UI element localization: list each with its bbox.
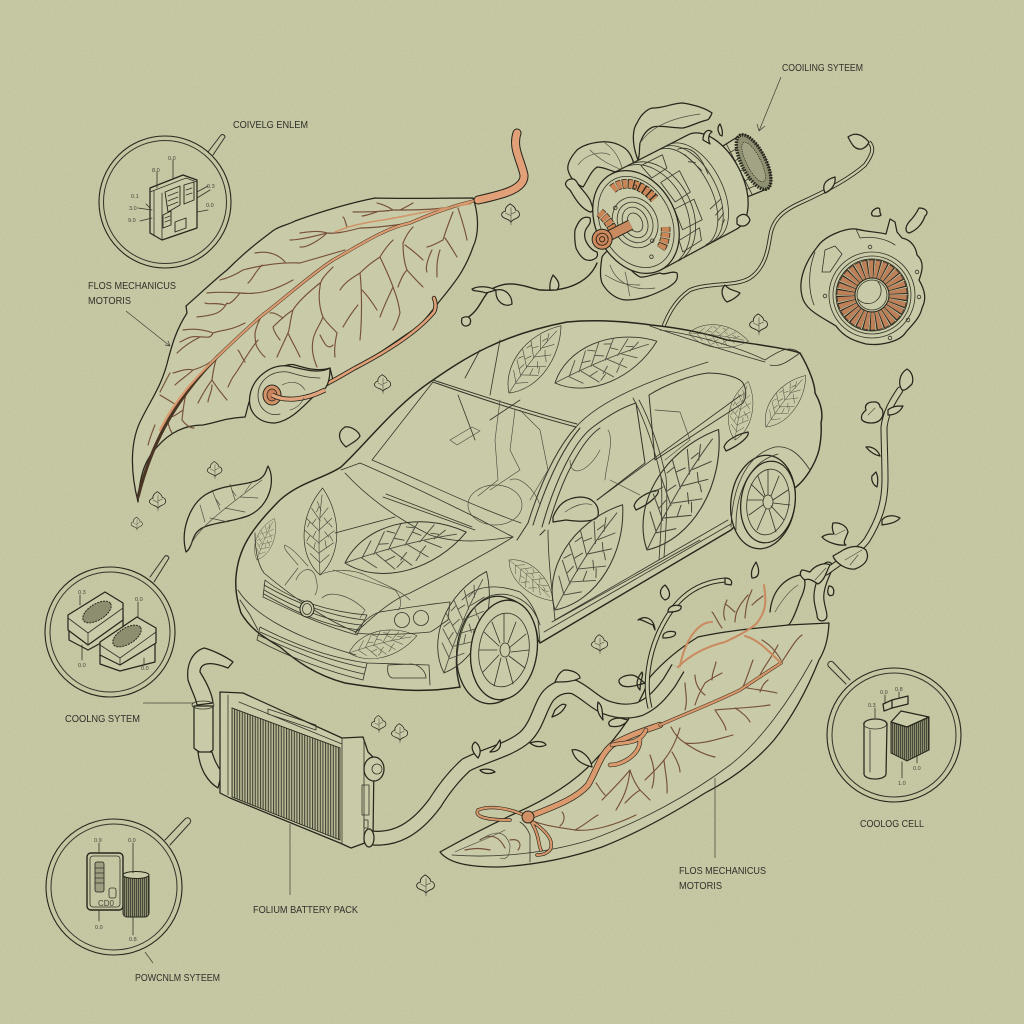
leaf outline [132,198,478,502]
circle inset: power: 0.8 [129,937,137,943]
label: upper flos mechanicus motoris: FLOS MECHANICUS [88,280,176,292]
rear wheel [725,451,801,553]
circle inset: modules: 0.0 [78,663,86,669]
small ivy leaves [131,204,767,896]
door handles [634,432,748,510]
label: cooling system left [65,703,194,725]
label: lower flos mechanicus motoris: MOTORIS [679,880,722,892]
radiator fins [232,708,340,840]
label: upper flos mechanicus motoris [88,280,176,346]
circle inset: chip [99,135,231,268]
circle inset: cell: 1.0 [898,781,906,787]
car interior linework [433,380,577,427]
seats and steering [450,400,690,525]
circle inset: cell: 0.3 [868,703,876,709]
lower grille and bumper [238,590,430,685]
circle inset: cell: 0.0 [913,766,921,772]
second vine [472,578,732,773]
grille and logo [263,580,367,635]
label: powcnlm syteem [135,952,220,984]
car [236,316,822,709]
midrib [138,200,478,497]
label: coolog cell: COOLOG CELL [860,818,924,830]
circle inset: chip: 9.0 [128,218,136,224]
circle inset: chip: 3.0 [129,206,137,212]
front wheel repaint [464,596,544,704]
lower leaf outline [440,623,829,867]
rear parcel and deck [650,326,800,366]
scroll hub [250,366,330,423]
upper-right vine and leaves [800,369,913,616]
circle inset: modules [45,556,175,697]
radiator [188,648,384,848]
label: coivelg enlem: COIVELG ENLEM [233,119,308,131]
leaf tip foliage [770,575,805,625]
lower leaf brown veins [465,590,802,850]
circle inset: power: 0.9 [94,838,102,844]
headlight [355,602,450,634]
label: cooling system with arrow [757,62,863,131]
circle inset: chip: 8.0 [152,168,160,174]
motor assembly [566,103,789,300]
big leaf with hose [132,133,524,502]
circle inset: power: 0.0 [128,838,136,844]
circle inset: chip: 0.0 [168,156,176,162]
radiator hose [188,648,233,788]
main vine: radiator to lower leaf [364,668,678,847]
hood lines [255,517,513,632]
label: lower flos mechanicus motoris [679,778,766,892]
circle inset: cell: 0.8 [895,687,903,693]
loose leaf [184,466,271,552]
vine: roof to upper right [660,134,872,338]
circle inset: chip: 0.1 [131,194,139,200]
label: cooling system with arrow: COOILING SYTEEM [782,62,863,74]
orange veins [477,585,781,855]
front wheel [450,591,544,709]
mirror [553,497,598,522]
motor petals [566,103,712,300]
leaf veins [148,203,467,445]
radiator frame [220,692,374,848]
circle inset: chip: 0.0 [206,203,214,209]
circle inset: power: CD0 [98,899,115,908]
circle inset: cell: 0.0 [880,690,888,696]
label: folium battery pack [253,824,358,916]
sill [544,520,731,632]
label: powcnlm syteem: POWCNLM SYTEEM [135,972,220,984]
circle inset: power [46,818,191,955]
circle inset: chip: 0.3 [207,184,215,190]
circle inset: modules: 0.0 [141,666,149,672]
label: lower flos mechanicus motoris: FLOS MECHANICUS [679,865,766,877]
lower hose [272,298,436,396]
motor bits [703,124,750,226]
circle inset: modules: 0.3 [78,590,86,596]
tie scrolls at base [455,830,510,859]
leaves inside car [248,316,816,680]
radiator fitting [362,757,384,828]
engine shapes under hood [284,545,410,618]
circle inset: modules: 0.0 [135,597,143,603]
circle inset: power: 0.0 [95,925,103,931]
thick stem [819,567,828,616]
circle inset: cell [827,661,961,802]
motor body [569,109,789,292]
car body fill and outline [236,321,822,690]
label: folium battery pack: FOLIUM BATTERY PACK [253,904,358,916]
stator [801,208,927,344]
label: upper flos mechanicus motoris: MOTORIS [88,295,131,307]
lower leaf [440,562,829,867]
vine: motor to leaf bud [462,263,597,326]
label: cooling system left: COOLNG SYTEM [65,713,140,725]
upper secondary orange vein [335,204,470,232]
rear wheel arch [731,447,810,530]
hose top [478,133,524,200]
front wheel arch [457,587,540,688]
